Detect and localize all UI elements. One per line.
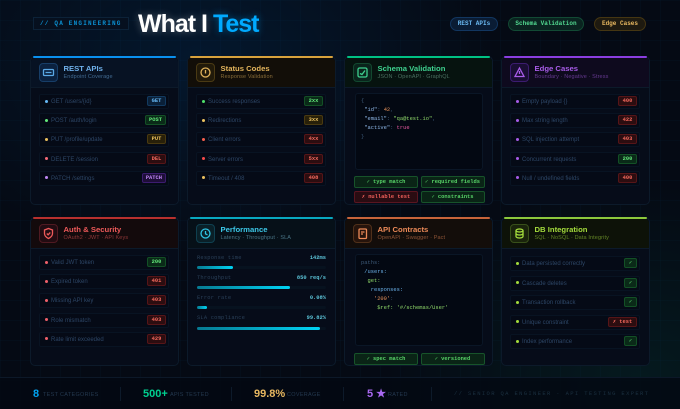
stat: APIs value: 500+ bbox=[143, 388, 168, 400]
stat: categories value: 8 bbox=[33, 388, 39, 400]
metric: SLA compliance: SLA compliance bbox=[197, 315, 245, 321]
YAML code block bbox=[355, 254, 483, 346]
panel header bbox=[31, 219, 178, 249]
panel accent line bbox=[347, 217, 490, 219]
row: POST: POST bbox=[149, 117, 162, 123]
pill: Edge Cases: Edge Cases bbox=[602, 20, 638, 27]
row: 5xx: Server errors bbox=[208, 157, 243, 163]
subheading: SQL · NoSQL · Data Integrity bbox=[534, 234, 609, 240]
row: 4xx: Client errors bbox=[208, 137, 241, 143]
panel: DB Integration bbox=[501, 217, 650, 366]
panel header bbox=[345, 219, 492, 249]
row: 3xx: Redirections bbox=[208, 118, 241, 124]
row: missing key: 403 bbox=[152, 297, 161, 303]
panel: Performance bbox=[187, 217, 336, 366]
metric: error rate: Error rate bbox=[197, 295, 231, 301]
stat: rating label: RATED bbox=[388, 392, 408, 398]
icon: checked document bbox=[353, 63, 372, 82]
heading: Schema Validation bbox=[378, 64, 445, 73]
pill: Edge Cases bbox=[594, 17, 646, 31]
value: error rate: 0.08% bbox=[310, 295, 326, 301]
panel header bbox=[188, 219, 335, 249]
row: SQL injection: SQL injection attempt bbox=[522, 137, 579, 143]
row: PATCH bbox=[39, 171, 169, 186]
icon: clock bbox=[196, 224, 215, 243]
chip: versioned bbox=[420, 353, 484, 365]
row: unique constraint: Unique constraint bbox=[522, 320, 569, 326]
chip: spec match bbox=[354, 353, 418, 365]
icon: endpoint bbox=[39, 63, 58, 82]
panel: Edge Cases bbox=[501, 56, 650, 205]
icon: shield bbox=[39, 224, 58, 243]
row: persisted: ✓ bbox=[629, 260, 632, 266]
subheading: Latency · Throughput · SLA bbox=[220, 234, 291, 240]
heading: API Contracts bbox=[378, 225, 428, 234]
icon: alert circle bbox=[196, 63, 215, 82]
stat: coverage label: COVERAGE bbox=[287, 392, 321, 398]
subheading: OAuth2 · JWT · API Keys bbox=[64, 234, 128, 240]
row: cascade bbox=[510, 276, 640, 290]
panel: Schema Validation bbox=[344, 56, 493, 205]
row: role mismatch bbox=[39, 313, 169, 328]
row: 3xx bbox=[196, 113, 326, 128]
row: concurrent: 200 bbox=[623, 156, 632, 162]
panel accent line bbox=[347, 56, 490, 58]
stat: categories label: TEST CATEGORIES bbox=[43, 392, 99, 398]
JSON code block bbox=[355, 93, 483, 170]
heading: REST APIs bbox=[64, 64, 103, 73]
header tag bbox=[33, 17, 129, 30]
chip: type match bbox=[354, 176, 418, 188]
chip: nullable test: ✗ nullable test bbox=[362, 194, 410, 200]
chip: type match: ✓ type match bbox=[367, 178, 405, 184]
bar: error rate bbox=[197, 306, 326, 309]
stat: APIs label: APIS TESTED bbox=[170, 392, 209, 398]
row: empty payload bbox=[510, 94, 640, 109]
panel header bbox=[31, 58, 178, 88]
row: GET bbox=[39, 94, 169, 109]
row: DELETE: DELETE /session bbox=[51, 157, 98, 163]
row: concurrent: Concurrent requests bbox=[522, 157, 576, 163]
metric: response time: Response time bbox=[197, 255, 242, 261]
panel header bbox=[502, 219, 649, 249]
row: valid JWT: Valid JWT token bbox=[51, 260, 94, 266]
row: max string bbox=[510, 113, 640, 128]
row: 3xx: 3xx bbox=[309, 117, 318, 123]
panel accent line bbox=[33, 217, 176, 219]
row: empty payload: 400 bbox=[623, 98, 632, 104]
row: rate limit bbox=[39, 332, 169, 347]
heading: Edge Cases bbox=[534, 64, 578, 73]
row: valid JWT bbox=[39, 255, 169, 270]
row: rate limit: Rate limit exceeded bbox=[51, 337, 104, 343]
heading: DB Integration bbox=[534, 225, 587, 234]
icon: warning triangle bbox=[510, 63, 529, 82]
row: expired: Expired token bbox=[51, 279, 88, 285]
footer signature: // SENIOR QA ENGINEER · API TESTING EXPERT bbox=[454, 390, 649, 397]
chip: required fields: ✓ required fields bbox=[425, 178, 480, 184]
row: PUT: PUT /profile/update bbox=[51, 137, 103, 143]
row: missing key bbox=[39, 293, 169, 308]
JSON code block: { "id": 42, "email": "qa@test.io", "active": true } bbox=[361, 98, 435, 140]
stat: rating value: 5 ★ bbox=[367, 388, 386, 400]
row: unique constraint bbox=[510, 314, 640, 330]
row: SQL injection: 403 bbox=[623, 136, 632, 142]
row: 4xx: 4xx bbox=[309, 136, 318, 142]
row: rollback: ✓ bbox=[629, 299, 632, 305]
row: persisted: Data persisted correctly bbox=[522, 261, 585, 267]
subheading: JSON · OpenAPI · GraphQL bbox=[378, 74, 450, 80]
row: role mismatch: 403 bbox=[152, 317, 161, 323]
chip: nullable test bbox=[354, 191, 418, 203]
chip: constraints: ✓ constraints bbox=[431, 194, 474, 200]
row: 2xx: Success responses bbox=[208, 99, 260, 105]
row: timeout bbox=[196, 171, 326, 186]
row: timeout: Timeout / 408 bbox=[208, 176, 244, 182]
panel accent line bbox=[504, 217, 647, 219]
panel accent line bbox=[504, 56, 647, 58]
row: PUT: PUT bbox=[152, 136, 161, 142]
value: response time: 142ms bbox=[310, 255, 326, 261]
panel accent line bbox=[190, 56, 333, 58]
icon: database bbox=[510, 224, 529, 243]
row: POST bbox=[39, 113, 169, 128]
panel accent line bbox=[33, 56, 176, 58]
icon: contract document bbox=[353, 224, 372, 243]
panel header bbox=[345, 58, 492, 88]
row: 5xx bbox=[196, 152, 326, 167]
panel: Status Codes bbox=[187, 56, 336, 205]
chip: constraints bbox=[420, 191, 484, 203]
pill: Schema Validation: Schema Validation bbox=[515, 20, 577, 27]
metric: throughput: Throughput bbox=[197, 275, 231, 281]
bar: response time bbox=[197, 266, 326, 269]
row: GET: GET /users/{id} bbox=[51, 99, 92, 105]
row: 5xx: 5xx bbox=[309, 156, 318, 162]
stat: coverage value: 99.8% bbox=[254, 388, 285, 400]
row: concurrent bbox=[510, 152, 640, 167]
bar: throughput bbox=[197, 286, 326, 289]
chip: versioned: ✓ versioned bbox=[435, 356, 470, 362]
panel header bbox=[502, 58, 649, 88]
row: PATCH: PATCH /settings bbox=[51, 176, 94, 182]
panel accent line bbox=[190, 217, 333, 219]
row: GET: GET bbox=[152, 98, 161, 104]
panel: API Contracts bbox=[344, 217, 493, 366]
pill: Schema Validation bbox=[508, 17, 584, 31]
pill: REST APIs bbox=[450, 17, 498, 31]
test list bbox=[39, 255, 169, 347]
heading: Performance bbox=[220, 225, 268, 234]
test list bbox=[510, 256, 640, 349]
row: index bbox=[510, 334, 640, 349]
footer stats bar bbox=[0, 377, 680, 409]
row: POST: POST /auth/login bbox=[51, 118, 97, 124]
row: index: ✓ bbox=[629, 338, 632, 344]
row: expired bbox=[39, 274, 169, 289]
row: cascade: Cascade deletes bbox=[522, 280, 567, 286]
row: index: Index performance bbox=[522, 339, 572, 345]
test list bbox=[196, 94, 326, 186]
row: rollback bbox=[510, 295, 640, 310]
pill: REST APIs: REST APIs bbox=[458, 20, 490, 27]
row: 2xx bbox=[196, 94, 326, 109]
row: empty payload: Empty payload {} bbox=[522, 99, 567, 105]
row: PUT bbox=[39, 132, 169, 147]
row: max string: 422 bbox=[623, 117, 632, 123]
row: null fields: Null / undefined fields bbox=[522, 176, 579, 182]
row: DELETE bbox=[39, 152, 169, 167]
heading: Status Codes bbox=[220, 64, 270, 73]
row: null fields bbox=[510, 171, 640, 186]
title: What I Test bbox=[138, 10, 258, 38]
row: missing key: Missing API key bbox=[51, 298, 93, 304]
row: persisted bbox=[510, 256, 640, 271]
row: role mismatch: Role mismatch bbox=[51, 318, 91, 324]
subheading: Response Validation bbox=[220, 74, 273, 80]
subheading: Boundary · Negative · Stress bbox=[534, 74, 608, 80]
bar: SLA compliance bbox=[197, 326, 326, 330]
header tag: // QA ENGINEERING bbox=[40, 20, 122, 27]
value: SLA compliance: 99.82% bbox=[307, 315, 326, 321]
row: expired: 401 bbox=[152, 278, 161, 284]
row: unique constraint: ✗ test bbox=[613, 318, 632, 324]
test list bbox=[39, 94, 169, 186]
value: throughput: 850 req/s bbox=[297, 275, 326, 281]
panel: Auth & Security bbox=[30, 217, 179, 366]
test list bbox=[510, 94, 640, 186]
chip: spec match: ✓ spec match bbox=[367, 356, 405, 362]
subheading: Endpoint Coverage bbox=[64, 74, 113, 80]
YAML code block: paths: /users: get: responses: '200': $ref: '#/schemas/User' bbox=[361, 260, 448, 311]
row: rate limit: 429 bbox=[152, 336, 161, 342]
row: null fields: 400 bbox=[623, 175, 632, 181]
chip: required fields bbox=[420, 176, 484, 188]
subheading: OpenAPI · Swagger · Pact bbox=[378, 234, 445, 240]
heading: Auth & Security bbox=[64, 225, 121, 234]
row: max string: Max string length bbox=[522, 118, 568, 124]
row: rollback: Transaction rollback bbox=[522, 300, 575, 306]
row: 2xx: 2xx bbox=[309, 98, 318, 104]
row: DELETE: DEL bbox=[152, 156, 161, 162]
row: 4xx bbox=[196, 132, 326, 147]
row: PATCH: PATCH bbox=[146, 175, 162, 181]
row: SQL injection bbox=[510, 132, 640, 147]
row: valid JWT: 200 bbox=[152, 259, 161, 265]
row: timeout: 408 bbox=[309, 175, 318, 181]
panel header bbox=[188, 58, 335, 88]
panel: REST APIs bbox=[30, 56, 179, 205]
row: cascade: ✓ bbox=[629, 280, 632, 286]
